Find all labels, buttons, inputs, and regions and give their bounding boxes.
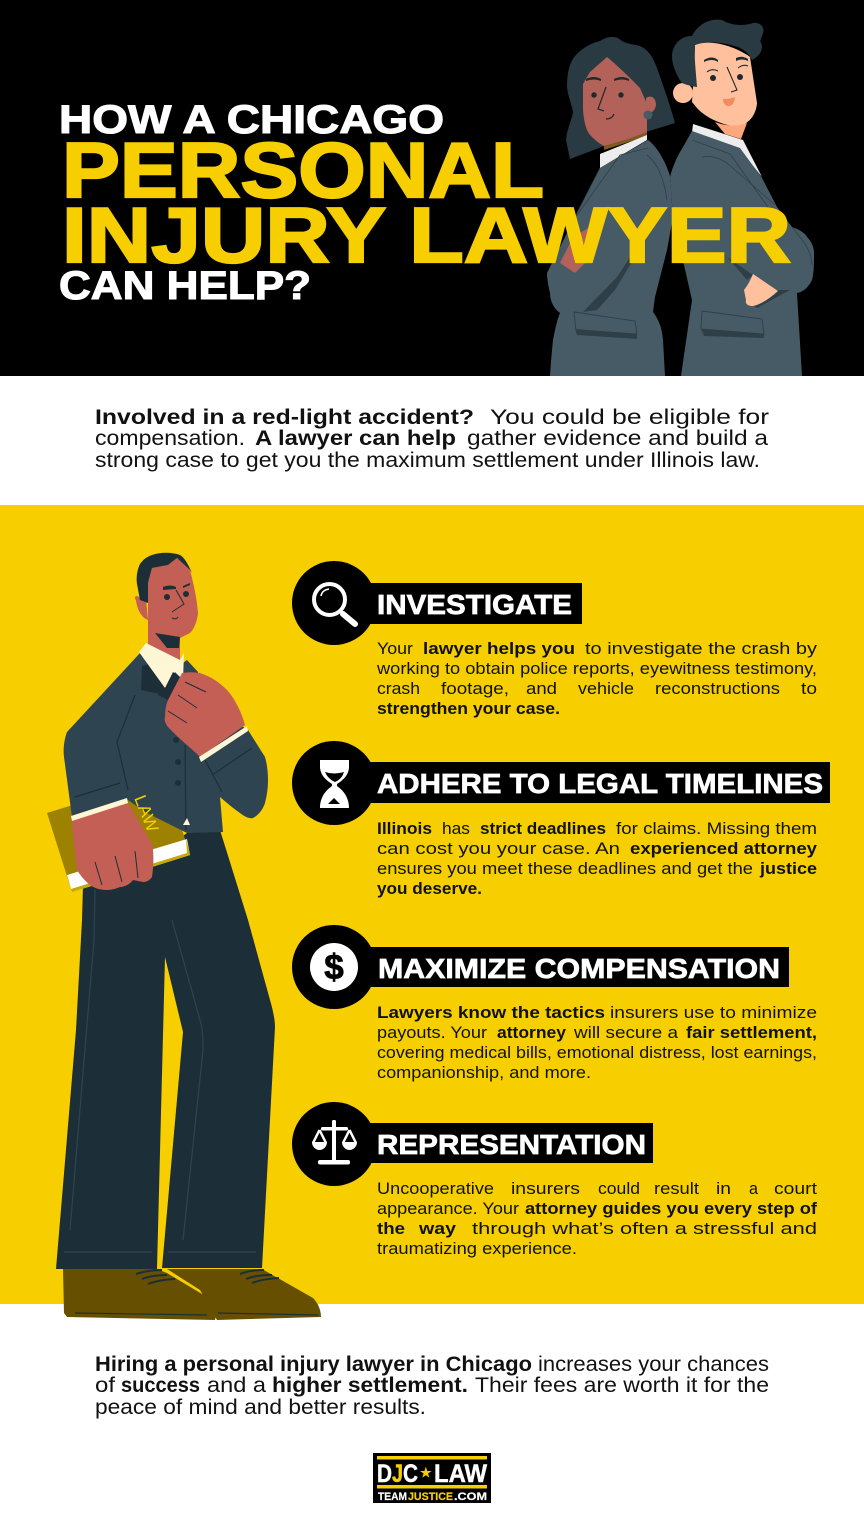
body text: through what’s often a stressful and [472, 1220, 817, 1238]
section: investigate [292, 561, 818, 718]
body text: covering medical bills, emotional distress, lost earnings, [377, 1044, 817, 1062]
heading: MAXIMIZE COMPENSATION [378, 953, 780, 984]
logo: DJC Law: C [403, 1460, 418, 1488]
body text: Your [377, 640, 414, 658]
text block: intro: You could be eligible for [490, 406, 769, 429]
body text: attorney [497, 1024, 567, 1042]
logo: DJC Law: J [392, 1460, 403, 1488]
body text: attorney guides you every step of [525, 1200, 818, 1218]
logo: DJC Law: .COM [454, 1491, 487, 1503]
woman [547, 37, 675, 376]
text block: intro [95, 406, 769, 472]
body text: to investigate the crash by [585, 640, 818, 658]
body text: will secure a [573, 1024, 679, 1042]
text block: conclusion: success [121, 1374, 200, 1397]
body text: Uncooperative [377, 1180, 494, 1198]
logo: DJC Law: LAW [434, 1460, 487, 1488]
text block: conclusion: Their fees are worth it for the [475, 1374, 769, 1397]
body text: strengthen your case. [377, 700, 560, 718]
illustration: two lawyers back to back [547, 20, 814, 376]
body text: experienced attorney [630, 840, 818, 858]
shoes [167, 1269, 321, 1320]
badge [292, 741, 830, 825]
body text: and [526, 680, 557, 698]
body text [377, 820, 818, 898]
body text: ensures you meet these deadlines and get the [377, 860, 753, 878]
illustration: lawyer holding law book [47, 553, 321, 1320]
heading: INVESTIGATE [377, 589, 572, 620]
section: representation [292, 1102, 818, 1258]
text block: conclusion: and a [207, 1374, 266, 1397]
trousers [56, 830, 275, 1269]
body text: result [654, 1180, 699, 1198]
badge [292, 925, 789, 1009]
body text: in [716, 1180, 731, 1198]
title: PERSONAL [62, 126, 544, 214]
text block: conclusion: of [95, 1374, 115, 1397]
body text: appearance. Your [377, 1200, 520, 1218]
body text: could [598, 1180, 640, 1198]
body text: footage, [441, 680, 509, 698]
body text: insurers [511, 1180, 580, 1198]
title: HOW A CHICAGO [59, 98, 444, 142]
body text: vehicle [578, 680, 634, 698]
title [59, 98, 791, 308]
body text: a [749, 1180, 759, 1198]
body text [377, 1180, 818, 1258]
body text: has [442, 820, 470, 838]
heading: REPRESENTATION [377, 1129, 646, 1160]
text block: conclusion: higher settlement. [272, 1374, 468, 1397]
body text: to [801, 680, 817, 698]
text block: conclusion [95, 1353, 769, 1419]
text block: intro: A lawyer can help [255, 427, 456, 450]
body text: strict deadlines [480, 820, 606, 838]
logo: DJC Law [373, 1453, 491, 1503]
body text: justice [759, 860, 817, 878]
text block: intro: gather evidence and build a [467, 427, 768, 450]
text block: conclusion: peace of mind and better results. [95, 1396, 426, 1419]
body text: Lawyers know the tactics [377, 1004, 605, 1022]
hand at chest [165, 672, 245, 757]
body text: crash [377, 680, 420, 698]
book label: LAW [130, 792, 162, 835]
body text: for claims. Missing them [616, 820, 817, 838]
collar [139, 643, 184, 688]
section: maximize compensation [292, 925, 817, 1082]
body text: way [418, 1220, 457, 1238]
badge [292, 561, 582, 645]
text block: intro: Involved in a red-light accident? [95, 406, 474, 429]
text block: intro: compensation. [95, 427, 245, 450]
body text: lawyer helps you [423, 640, 575, 658]
body text: fair settlement, [686, 1024, 817, 1042]
icon: magnifying glass [314, 584, 355, 624]
icon: dollar sign: $ [324, 948, 344, 987]
head and neck [148, 612, 180, 664]
body text: insurers use to minimize [610, 1004, 817, 1022]
body text: the [377, 1220, 405, 1238]
icon: hourglass [320, 760, 349, 808]
text block: intro: strong case to get you the maximum settlement under Illinois law. [95, 449, 760, 472]
body text: traumatizing experience. [377, 1240, 577, 1258]
badge [292, 1102, 653, 1186]
body text: reconstructions [655, 680, 780, 698]
man [670, 20, 814, 376]
book [47, 776, 190, 892]
hand holding book [72, 803, 153, 890]
body text: court [774, 1180, 817, 1198]
body text: can cost you your case. An [377, 840, 620, 858]
logo: DJC Law: JUSTICE [408, 1491, 453, 1503]
section: legal timelines [292, 741, 830, 898]
logo: DJC Law: TEAM [378, 1491, 407, 1503]
text block: conclusion: Hiring a personal injury lawyer in Chicago [95, 1353, 532, 1376]
title: INJURY LAWYER [62, 191, 791, 279]
text block: conclusion: increases your chances [538, 1353, 769, 1376]
body text [376, 640, 818, 718]
icon: dollar sign [310, 943, 358, 991]
heading: ADHERE TO LEGAL TIMELINES [377, 768, 823, 799]
body text: you deserve. [377, 880, 482, 898]
panel: yellow background [0, 505, 864, 1304]
body text: payouts. Your [377, 1024, 488, 1042]
panel: header [0, 0, 864, 376]
body text: Illinois [377, 820, 432, 838]
icon: scales of justice [312, 1120, 357, 1164]
body text: companionship, and more. [377, 1064, 591, 1082]
logo: DJC Law: D [377, 1460, 392, 1488]
title: CAN HELP? [59, 264, 311, 308]
body text: working to obtain police reports, eyewitness testimony, [376, 660, 817, 678]
logo: DJC Law: ★ [420, 1465, 432, 1480]
jacket [64, 653, 268, 833]
body text [377, 1004, 817, 1082]
